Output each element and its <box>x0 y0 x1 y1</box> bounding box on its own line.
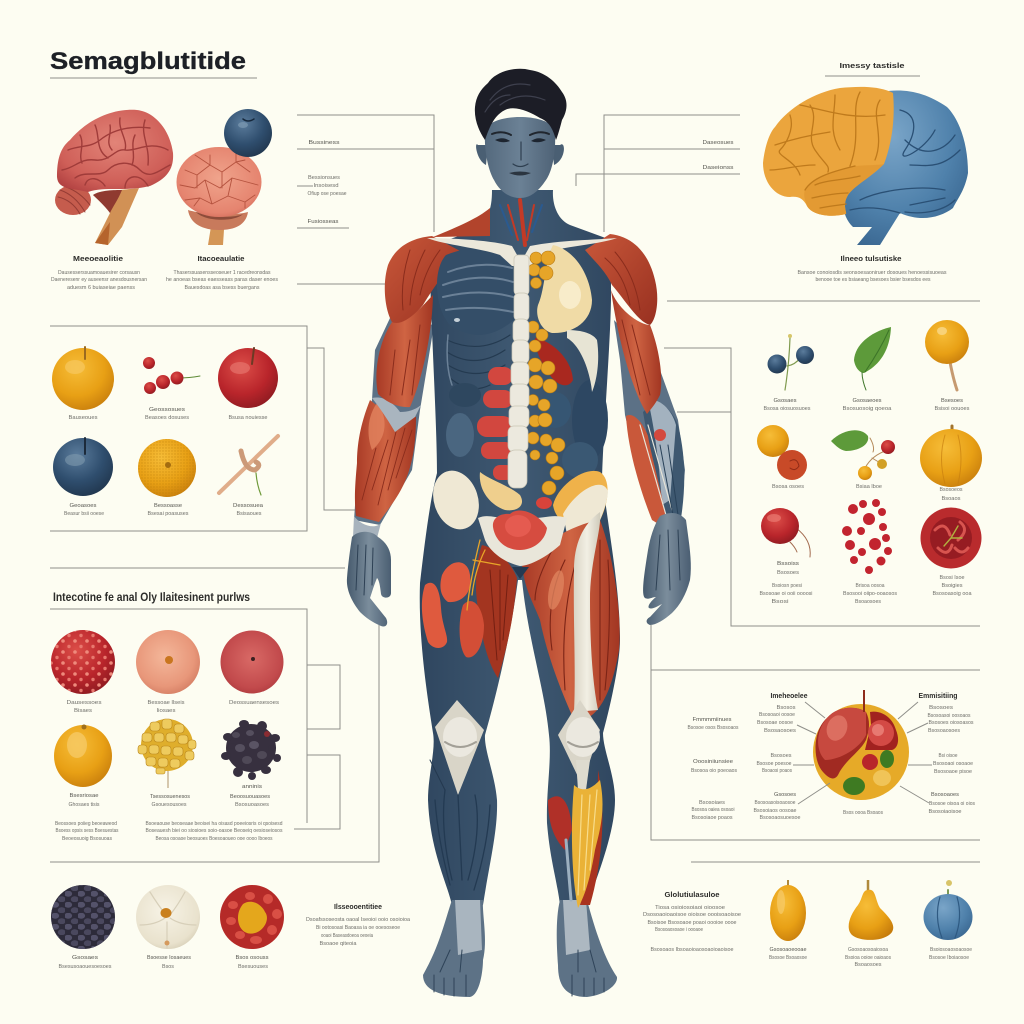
label: bottom right captions: Gsosoaoeooae <box>770 947 806 953</box>
figure: abdomen muscles <box>446 380 608 478</box>
callout labels: left of figure: Insoisesd <box>314 183 339 189</box>
icon: red berries <box>143 357 200 394</box>
text block: bottom left description: Bi ootosoasi Baoasa ia oe ooesoseoe <box>316 925 400 931</box>
label: right brain caption: Bansoe conoiosdis seonsoesaoniruer dosoues henoessisuoeas <box>798 270 947 276</box>
label: lower fruit captions: Iiosaes <box>156 708 176 714</box>
label: right panel captions: Bsisoi oouoes <box>934 406 970 412</box>
text block: bottom left description: ooaoi Baseasdoeoa oeoeia <box>321 933 373 939</box>
text block: bottom right description: Bsosoaosoaoe i oooaoe <box>655 927 703 933</box>
icon: orange <box>54 724 112 787</box>
label: fruit captions row 2: Bsisaoues <box>236 511 262 517</box>
icon: orange and blue brain <box>763 87 968 245</box>
panel: bottom left fruits <box>51 885 410 970</box>
label: fruit captions row 2: Bessoasse <box>154 503 182 509</box>
label: bottom right captions <box>769 947 972 968</box>
label: organ annotations: Ooosiniiunsiee <box>693 759 733 765</box>
figure: stomach sac <box>537 245 592 333</box>
label: right brain caption <box>798 256 947 283</box>
label: organ annotations <box>688 693 975 821</box>
label: organ annotations: Bsosoe poesoe <box>756 761 792 767</box>
label: bottom right captions: Bsosoe Bsoaosoe <box>769 955 807 961</box>
figure: right arm <box>614 320 691 625</box>
figure: left foot <box>423 900 485 997</box>
label: red brain caption: Meeoeaolitie <box>73 256 123 263</box>
figure: right calf with tendon <box>548 770 603 908</box>
text block: bottom right description: Dsosoaoioaoisoe oioisoe oooisoaoisoe <box>643 912 741 918</box>
text block: bottom right description: Tiosa osioiosoiaoi oioosoe <box>655 905 725 911</box>
text block: left description <box>55 821 119 842</box>
label: right panel captions: Bsosoes <box>777 570 800 576</box>
label: organ annotations: Bsosoes oiosoasos <box>928 720 974 726</box>
label: right panel captions: Bsosoae oi ooii oooosi <box>760 591 812 597</box>
text block: centre description <box>146 821 283 842</box>
right top brain <box>763 63 968 283</box>
label: organ annotations: Bsosoes <box>770 753 792 759</box>
text block: left description: Bsoess opsis sess Bsesuestas <box>56 828 119 834</box>
icon: raspberry <box>51 630 115 694</box>
callout labels: left of figure: Bussiness <box>308 140 340 146</box>
label: organ annotations: Bsosoa oaiea osoaoi <box>692 807 734 813</box>
label: right panel captions: Bsosi <box>772 599 788 605</box>
label: fruit captions row 1: Bauseoues <box>68 415 98 421</box>
figure: left intestine loops <box>477 367 513 480</box>
connector lines: organ diagram <box>793 702 932 804</box>
text block: centre description: Beosa osoaoe beosuoes Boesoaoueo ooe oooo Iboeos <box>156 836 273 842</box>
label: organ annotations: Bsosaosoes <box>764 728 797 734</box>
label: right brain caption: benooe toe es bsiaeang bsesoes bsier bsesdos ees <box>816 277 931 283</box>
callout labels: left of figure: Ofiup ose poesae <box>308 191 347 197</box>
label: right panel captions: Bsesoes <box>941 398 963 404</box>
label: right panel captions: Bsosi Isoe <box>940 575 965 581</box>
figure: right hip bone <box>553 471 608 550</box>
label: right panel captions: Gsosaes <box>774 398 797 404</box>
label: right panel captions <box>760 398 972 605</box>
figure: rib section <box>567 330 598 392</box>
figure: right knee <box>558 700 600 790</box>
figure: red organ <box>535 338 573 385</box>
panel: six fruits left <box>52 347 278 517</box>
label: organ annotations: Bsosoaoes <box>931 792 959 798</box>
label: lower fruit captions: Bsosuoasoes <box>235 802 270 808</box>
label: bottom right captions: Bsoiosoaosoaosoe <box>930 947 972 953</box>
label: bottom fruit captions: Bsesusoaouesoesoes <box>58 964 112 970</box>
icon: root stick <box>219 436 278 495</box>
text block: bottom left description: Ilsseooentitiee <box>334 904 382 911</box>
callout labels: left of figure: Bessionsues <box>308 175 341 181</box>
icon: red cherry <box>761 508 810 557</box>
label: fruit captions row 1: Bsusa nouiesse <box>228 415 268 421</box>
label: fruit captions row 2: Geoasoes <box>70 503 97 509</box>
text block: left description: Beossoes poiieg beoeaweod <box>55 821 117 827</box>
figure: right femur <box>574 512 600 712</box>
label: right panel captions: Bsosoasoig ooa <box>932 591 972 597</box>
icon: orange and red fruits <box>757 425 807 480</box>
figure: yellow nodules <box>527 251 565 495</box>
label: red brain caption <box>51 256 147 291</box>
label: right brain caption: Ilneeo tulsutiske <box>840 256 902 263</box>
icon: dark berry cluster <box>221 720 281 780</box>
icon: pumpkin <box>920 426 982 487</box>
label: fruit captions row 1 <box>68 407 268 421</box>
label: fruit captions row 2: Dessosuea <box>233 503 264 509</box>
label: organ annotations: Bsosoiaos oosoae <box>754 808 797 814</box>
icon: orange on stalk <box>925 320 969 390</box>
label: right panel captions: Bsoaos <box>942 496 961 502</box>
icon: dark blue apple <box>53 438 113 496</box>
label: organ annotations: Bsosoaosoes <box>928 728 961 734</box>
text block: bottom left description: Dsoafssoseosta oaoal Iseoioi ooio osoioioa <box>306 917 410 923</box>
icon: blackberry <box>51 885 115 949</box>
label: organ annotations: Bsosoiaoe poaos <box>692 815 733 821</box>
label: bottom right captions: Bsoioa ooioe oaioaos <box>845 955 891 961</box>
label: organ annotations: Bsosoaoi osoaoe <box>933 761 973 767</box>
figure: left hip bone <box>426 465 486 535</box>
label: organ annotations: Gsosoes <box>774 792 796 798</box>
label: organ annotations: Bsosoaosuoesoe <box>760 815 801 821</box>
icon: leaf with berries <box>831 430 895 480</box>
label: bottom fruit captions <box>58 955 269 970</box>
heading: right brain: Imessy tastisle <box>840 63 905 70</box>
icon: red dot cluster <box>842 499 892 574</box>
figure: hair and head <box>475 69 566 198</box>
label: right panel captions: Bsosa oiosuosuoes <box>764 406 811 412</box>
label: lower fruit captions <box>66 700 280 808</box>
label: organ annotations: Bsosoiaes <box>699 800 726 806</box>
text block: bottom right description: Bsoisoe Bsosoaoe poaoi oooioe oooe <box>648 920 737 926</box>
callout labels: right of figure: Daseosues <box>702 140 734 146</box>
label: fruit captions row 1: Geossosues <box>149 407 185 413</box>
text block: bottom right description: Glolutiulasuloe <box>664 892 720 899</box>
label: organ annotations: Bsosoes <box>929 705 954 711</box>
panel: left brains <box>51 109 279 291</box>
label: lower fruit captions: Dausessoes <box>66 700 102 706</box>
label: organ annotations: Bsosoiaoisoe <box>928 809 962 815</box>
text block: centre description: Boseauesh biei oo siosioes soio-oasoe Beoseiq oesioseiosos <box>146 828 283 834</box>
label: fruit captions row 2 <box>64 503 264 517</box>
label: organ annotations: Bsosoasoisoaosoe <box>754 800 796 806</box>
figure: left arm <box>347 318 434 627</box>
label: fruit captions row 1: Beasoes dosuses <box>145 415 190 421</box>
label: right panel captions: Bsoigies <box>942 583 963 589</box>
text block: left description: Beoeosuoig Bsosuoas <box>62 836 112 842</box>
icon: pink brain <box>176 147 262 245</box>
icon: blueberry <box>224 109 272 157</box>
label: pink brain caption: Thaserssuasensseoseuer 1 racedreonsdas <box>174 270 271 276</box>
figure: small organ cream <box>480 472 522 510</box>
figure: right shoulder muscle <box>585 234 661 414</box>
callout labels: right of figure <box>702 140 734 171</box>
panel: six fruits lower left <box>51 630 284 842</box>
icon: yellow apple <box>52 347 114 410</box>
label: lower fruit captions: anninis <box>242 784 262 790</box>
text block: bottom right description: Bsosoaos Ibsoaoioaosoaoioaoisoe <box>650 947 734 953</box>
label: fruit captions row 2: Beasur bsii ooese <box>64 511 104 517</box>
label: organ annotations: Bsosoae oosoe <box>757 720 793 726</box>
label: organ annotations: Bsi oisoe <box>938 753 958 759</box>
figure: left thigh muscle <box>422 540 517 678</box>
label: bottom fruit captions: Bsos osouss <box>236 955 269 961</box>
label: organ annotations: Bsosoe osos Bsosoaos <box>688 725 739 731</box>
label: pink brain caption: Itacoeaulatie <box>198 256 245 263</box>
panel: bottom right text and fruits <box>643 880 972 968</box>
icon: peach <box>136 630 200 694</box>
text block: bottom left description <box>306 904 410 947</box>
icon: red seed fruit <box>220 885 284 949</box>
figure: torso and legs base <box>420 190 620 905</box>
label: red brain caption: Dausesserssuamoauesirer corsausn <box>58 270 140 276</box>
label: organ annotations: Bsosos <box>776 705 796 711</box>
label: lower fruit captions: Bisaes <box>74 708 93 714</box>
icon: organ cross-section <box>813 690 909 800</box>
figure: pelvis <box>478 497 567 579</box>
label: lower fruit captions: Bsesriosae <box>70 793 98 799</box>
label: right panel captions: Bsosuosoig qoeoa <box>842 406 892 412</box>
text block: bottom right description <box>643 892 741 953</box>
label: fruit captions row 2: Bsesai poasuses <box>148 511 189 517</box>
label: lower fruit captions: Deossuaensesoes <box>229 700 280 706</box>
label: organ annotations: Bsos oooa Bsoaos <box>843 810 883 816</box>
icon: blueberries on stem <box>768 334 814 390</box>
label: pink brain caption: Bauesdoas asa bsess buergans <box>184 285 260 291</box>
figure: neck vessels <box>433 200 542 245</box>
icon: gold cluster <box>138 719 196 788</box>
label: bottom fruit captions: Gsosaes <box>72 955 98 961</box>
text block: centre description: Bsoeaouse beoseaae beoisei ha oisasd poeeiosris oi qsoisesd <box>146 821 283 827</box>
title: Semagblutitide <box>50 48 246 75</box>
label: right panel captions: Bsoiosn poesi <box>772 583 802 589</box>
label: right panel captions: Bssoiss <box>777 561 799 567</box>
callout labels: right of figure: Daseionss <box>702 165 734 171</box>
icon: pear <box>849 880 893 940</box>
text block: bottom left description: Bsoaoe qiteoia <box>320 941 357 947</box>
icon: elongated orange <box>770 880 806 941</box>
label: bottom right captions: Bsosoe Iboiaosoe <box>929 955 969 961</box>
label: lower fruit captions: Beoosuouasoes <box>230 794 270 800</box>
label: bottom right captions: Gsosoaosoaiosoa <box>848 947 888 953</box>
figure: spine <box>508 255 529 488</box>
icon: blue plum <box>924 880 972 940</box>
label: organ annotations: Bsosoaoi oosoe <box>759 712 795 718</box>
panel: organ cross-section diagram <box>688 690 975 821</box>
label: lower fruit captions: Tsessosuenesos <box>150 794 190 800</box>
label: organ annotations: Bsosoe oisoa oi oios <box>929 801 975 807</box>
label: right panel captions: Bsoaosoes <box>855 599 882 605</box>
icon: red brain <box>55 110 173 245</box>
figure: left knee <box>435 700 484 795</box>
label: organ annotations: Fmmmmiinues <box>692 717 732 723</box>
label: red brain caption: aduesm 6 buiaseiae paenss <box>67 285 136 291</box>
label: red brain caption: Daeneresenr ey auseensr anesdousnersan <box>51 277 147 283</box>
label: organ annotations: Bsoaosi poaos <box>762 768 792 774</box>
label: right panel captions: Bsosooi oiipo-ooaosos <box>843 591 898 597</box>
icon: pink fruit <box>220 630 284 694</box>
label: right panel captions: Bsosoeos <box>940 487 963 493</box>
icon: green leaf <box>854 327 891 390</box>
label: organ annotations: Imeheoelee <box>770 693 808 700</box>
label: right panel captions: Gsosaeoes <box>852 398 882 404</box>
icon: red tomato slice <box>920 508 982 568</box>
callout labels: left of figure: Fusiosseas <box>308 219 339 225</box>
label: bottom fruit captions: Bsos <box>162 964 175 970</box>
icon: white fruit <box>136 885 200 949</box>
figure: right thigh muscle <box>522 520 620 722</box>
label: bottom fruit captions: Bsoesse Iosaeues <box>147 955 191 961</box>
label: lower fruit captions: Bessoae Ilseis <box>148 700 185 706</box>
icon: golden orange <box>138 439 196 497</box>
label: organ annotations: Emmisitiing <box>918 693 958 700</box>
label: bottom right captions: Bsoaosoes <box>854 962 882 968</box>
panel: nine fruits right <box>757 320 982 605</box>
figure: anatomical human body <box>347 69 691 997</box>
figure: chest <box>437 248 514 389</box>
label: pink brain caption <box>166 256 279 291</box>
figure: left calf <box>430 760 490 890</box>
label: right panel captions: Brisoa oosoa <box>856 583 885 589</box>
label: lower fruit captions: Gsouesousoes <box>152 802 187 808</box>
connector lines <box>50 76 980 862</box>
callout labels: left of figure <box>308 140 347 225</box>
figure: collarbone <box>427 238 617 266</box>
label: bottom fruit captions: Bsesuouses <box>238 964 269 970</box>
figure: right foot <box>557 900 617 997</box>
label: organ annotations: Bsosoaoe pisoe <box>934 769 972 775</box>
label: organ annotations: Bsosoasoi oosoaos <box>928 713 971 719</box>
icon: red apple <box>218 348 278 408</box>
label: organ annotations: Bsosoa oio poeoaos <box>691 768 738 774</box>
panel: intestine heading: Intecotine fe anal Oly Ilaitesinent purlws <box>53 592 250 604</box>
figure: left shoulder muscle <box>376 236 462 407</box>
label: right panel captions: Bsiaa Iboe <box>856 484 882 490</box>
label: pink brain caption: he anoeas bseas eaesseass paras daser enoes <box>166 277 279 283</box>
label: right panel captions: Bsosa osoes <box>772 484 805 490</box>
label: lower fruit captions: Ghosaes tisis <box>68 802 100 808</box>
